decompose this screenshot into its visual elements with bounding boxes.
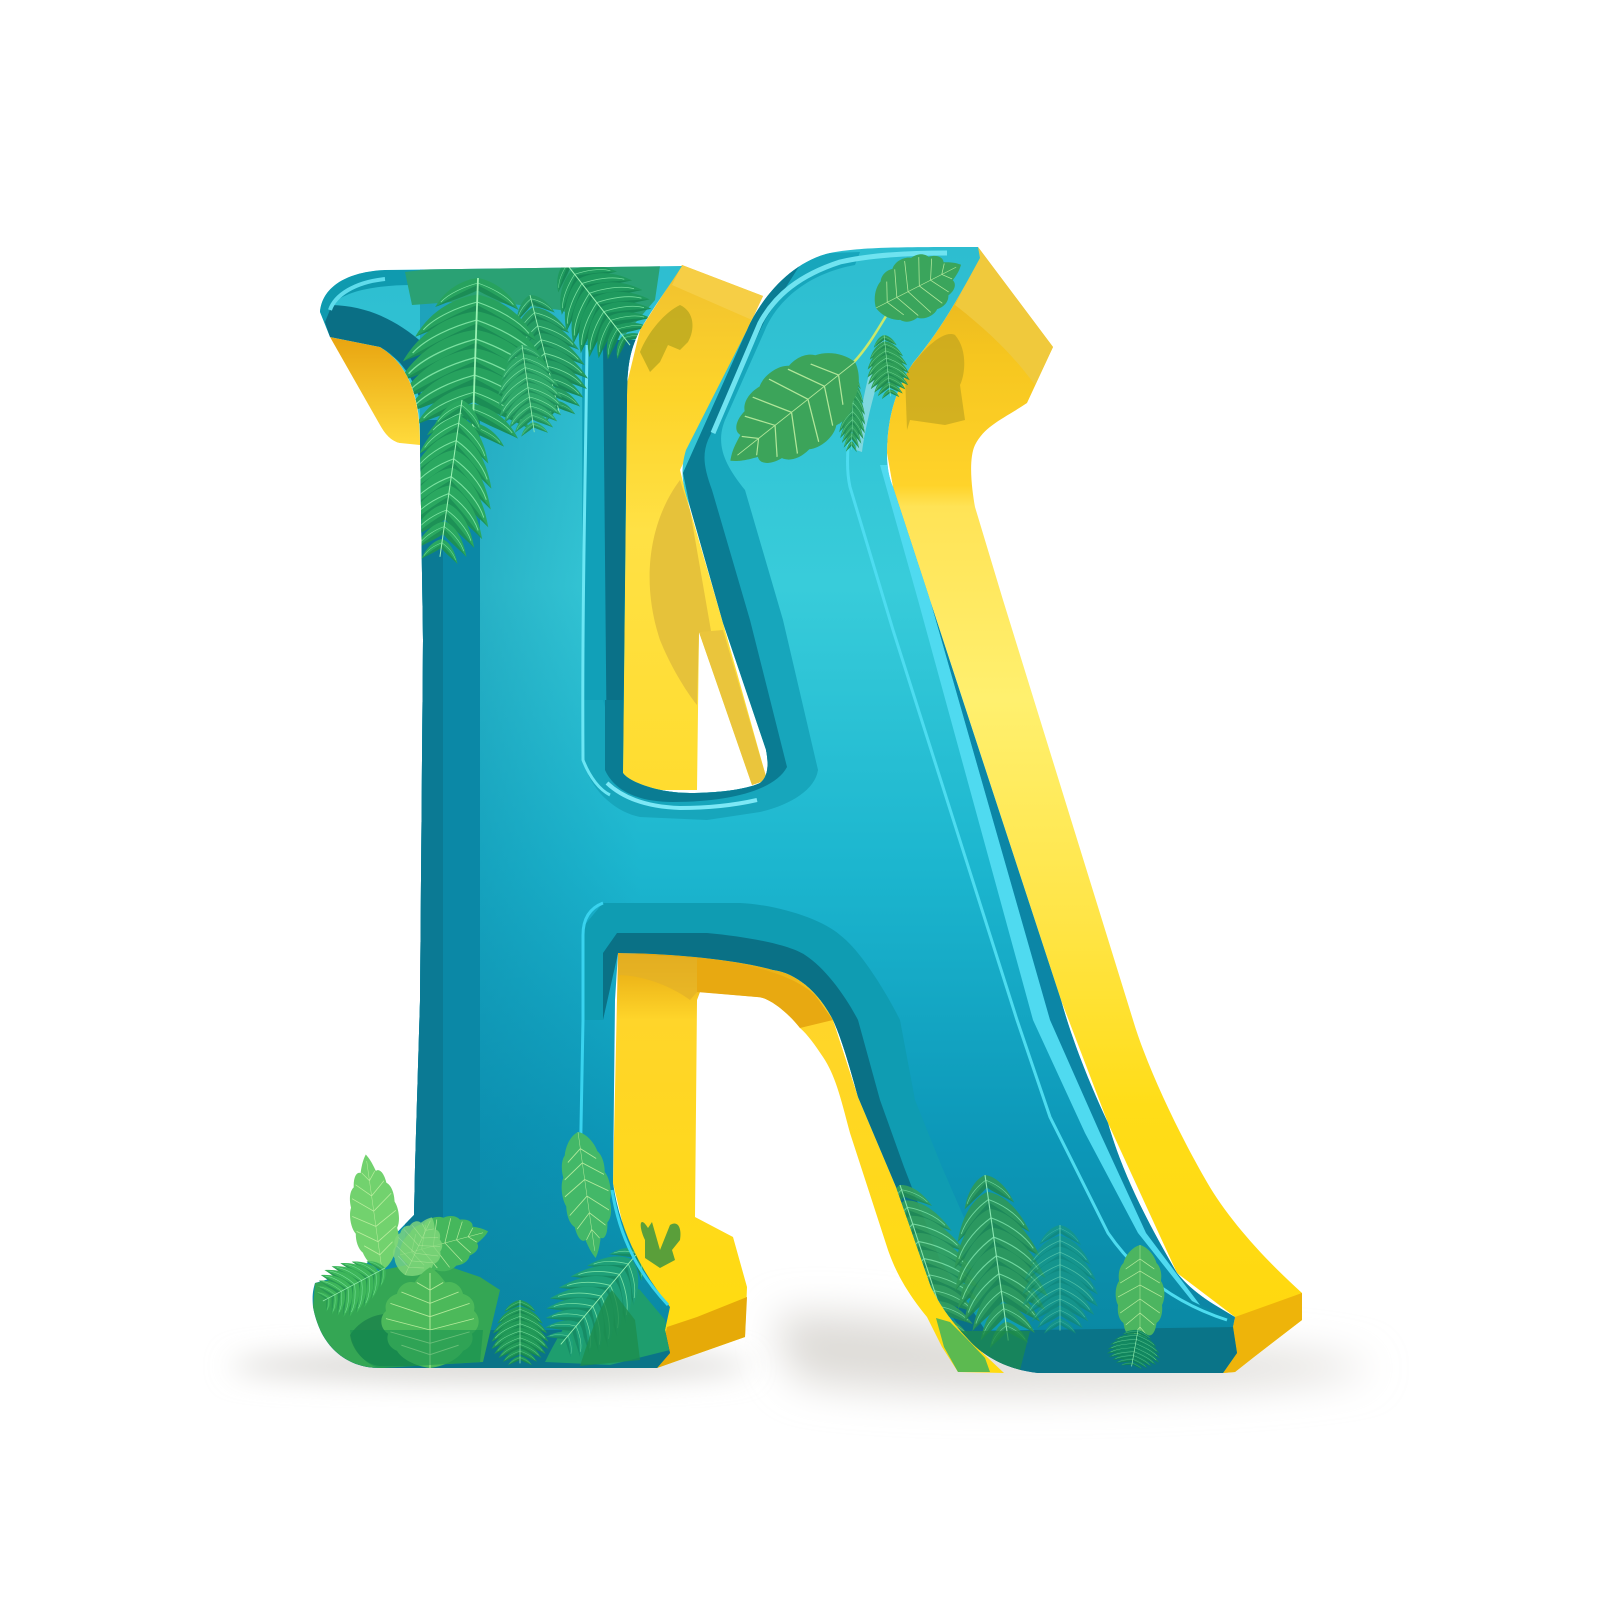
- bevel: diagonal left band and upper-hole surround: [583, 252, 860, 820]
- bevel: foot lip right: [960, 1327, 1240, 1375]
- bevel: diagonal right edge: [887, 440, 1240, 1322]
- ground shadow right: [779, 1314, 1375, 1392]
- foliage: right sprig with leaves: [703, 236, 975, 495]
- yellow extrusion: right side of diagonal: [887, 247, 1302, 1373]
- foliage: top-left palm fronds: [403, 266, 660, 564]
- foliage: bottom-centre plants: [492, 1129, 681, 1372]
- bevel: left stem outer edge: [408, 420, 480, 1221]
- yellow extrusion: top-left serif: [330, 337, 420, 445]
- leaf shadow on right yellow: [905, 334, 965, 430]
- ground shadow left: [230, 1352, 750, 1380]
- foliage: right foot fronds: [896, 1174, 1164, 1372]
- bevel: left stem inner band: [582, 340, 636, 764]
- bevel: crossbar lower arch and right leg left band: [583, 903, 1040, 1340]
- leaf on yellow wedge: [936, 1318, 990, 1372]
- yellow extrusion: upper stem and inner wedge: [620, 265, 767, 790]
- foliage: bottom-left bush: [309, 1151, 500, 1368]
- leaf on yellow foot: [641, 1222, 681, 1268]
- bevel: top-left serif: [320, 270, 420, 360]
- teal front face of the letter: [300, 240, 1260, 1380]
- leaf shadow on upper yellow: [640, 305, 693, 372]
- bevel: foot lip left: [320, 1330, 670, 1368]
- yellow extrusion: lower stem and foot: [613, 953, 1004, 1373]
- highlight lines: [330, 253, 1227, 1320]
